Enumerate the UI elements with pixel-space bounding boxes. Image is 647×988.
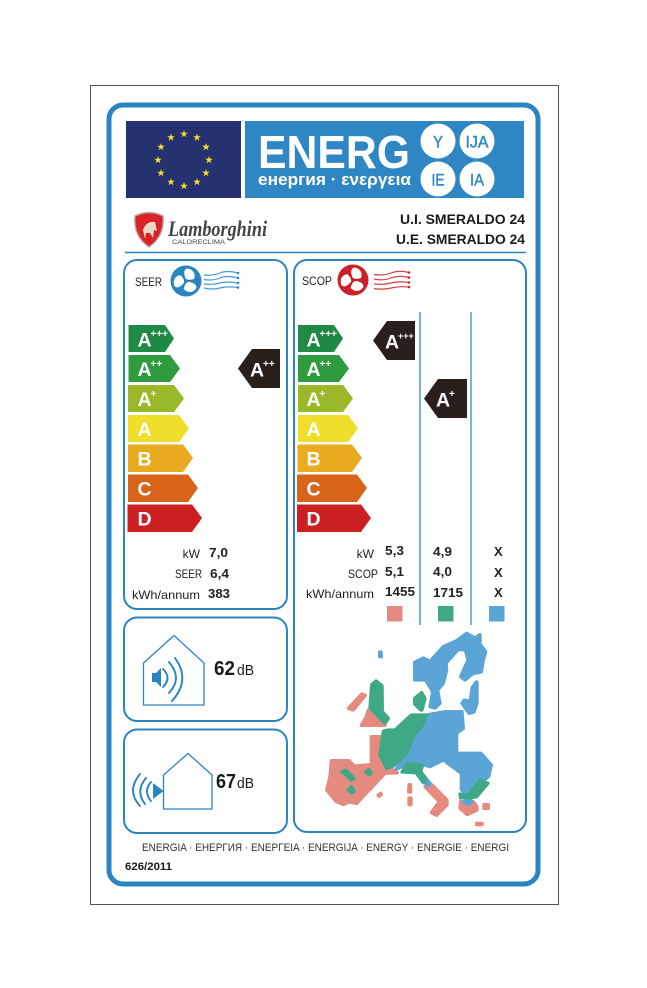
energy scale: B	[138, 448, 152, 470]
energy scale: +	[150, 389, 156, 400]
rating arrow A++: A	[250, 360, 264, 382]
SEER values: kW	[183, 547, 201, 561]
rating arrow A+	[424, 379, 467, 418]
energy scale	[297, 325, 371, 532]
SEER values: 6,4	[210, 566, 230, 581]
regulation number: 626/2011	[125, 861, 172, 873]
SCOP values: 5,1	[385, 564, 404, 579]
energy scale: D	[138, 508, 152, 530]
energy scale: ++	[150, 359, 162, 370]
energy scale: A	[306, 419, 321, 441]
panel: SEER cooling	[124, 260, 287, 609]
rating arrow A+++: +++	[398, 331, 414, 341]
SEER values: 383	[208, 586, 230, 601]
indoor noise value: dB	[237, 662, 254, 679]
indoor noise value: 62	[214, 658, 235, 680]
icon: cooling fan	[170, 266, 202, 296]
SCOP heading: SCOP	[302, 274, 332, 288]
energy scale: A	[306, 389, 321, 411]
icon: heating fan	[338, 264, 368, 296]
energy banner: IA	[470, 170, 485, 190]
energy scale: A	[306, 330, 321, 352]
energy banner	[245, 121, 524, 198]
rating arrow A+++: A	[385, 332, 399, 354]
outdoor noise value	[216, 771, 254, 793]
energy scale: A	[138, 359, 152, 381]
icon: house outline	[144, 636, 204, 705]
energy scale	[128, 325, 202, 532]
SCOP values: 5,3	[385, 543, 404, 558]
SEER values: kWh/annum	[132, 588, 200, 602]
icon: warm air waves	[374, 271, 410, 289]
outdoor noise value: 67	[216, 771, 236, 793]
model names	[396, 211, 525, 247]
energy scale: C	[306, 478, 321, 500]
indoor noise value	[214, 658, 254, 680]
rating arrow A++	[238, 349, 280, 388]
energy scale: A	[306, 359, 321, 381]
icon: house outline	[164, 754, 212, 809]
energy scale: A	[138, 419, 152, 441]
energy scale: A	[138, 330, 152, 352]
energy banner: Y	[433, 132, 443, 152]
SCOP values: SCOP	[348, 567, 378, 581]
footer languages: ENERGIA · ЕНЕРГИЯ · ΕΝΕΡΓΕΙΑ · ENERGIJA · ENERGY · ENERGIE · ENERGI	[142, 842, 509, 854]
icon: speaker with sound waves	[133, 774, 162, 806]
rating arrow A++: ++	[263, 359, 275, 370]
model names: U.I. SMERALDO 24	[400, 211, 525, 227]
EU flag	[126, 121, 241, 198]
SCOP values: 4,9	[433, 544, 452, 559]
brand logo: Lamborghini	[167, 216, 268, 241]
SCOP values: 1455	[385, 584, 415, 599]
panel: indoor noise	[124, 618, 287, 721]
energy banner: IE	[432, 170, 444, 190]
energy scale: A	[138, 389, 152, 411]
energy scale: D	[306, 508, 321, 530]
panel: SCOP heating and map	[294, 260, 526, 832]
icon: cold air waves	[204, 272, 239, 289]
energy scale: +	[320, 389, 326, 400]
energy scale: ++	[320, 359, 331, 370]
outdoor noise value: dB	[237, 775, 254, 792]
SCOP values: X	[494, 544, 503, 559]
SCOP values: kW	[357, 547, 375, 561]
label frame	[109, 105, 538, 884]
rating arrow A+: A	[436, 390, 450, 412]
SCOP values: 4,0	[433, 564, 452, 579]
icon: speaker with sound waves	[152, 658, 182, 701]
energy scale: +++	[320, 329, 337, 340]
rating arrow A+++	[373, 321, 415, 360]
model names: U.E. SMERALDO 24	[396, 231, 525, 247]
SEER heading: SEER	[135, 275, 162, 289]
energy banner: енергия · ενεργεια	[258, 171, 411, 189]
brand logo	[135, 212, 268, 247]
energy scale: B	[306, 448, 321, 470]
SCOP values: X	[494, 585, 503, 600]
SEER values	[132, 545, 230, 602]
rating arrow A+: +	[449, 389, 455, 400]
brand logo: CALORECLIMA	[172, 239, 226, 246]
SCOP values: X	[494, 565, 503, 580]
energy scale: C	[138, 478, 152, 500]
outer page border	[90, 86, 558, 904]
energy banner: ENERG	[258, 126, 410, 178]
SEER values: SEER	[175, 567, 202, 581]
map of Europe climate zones	[327, 633, 491, 825]
panel: outdoor noise	[124, 730, 287, 833]
SCOP values: kWh/annum	[306, 587, 374, 601]
energy scale: +++	[150, 329, 168, 340]
energy banner: IJA	[466, 132, 489, 152]
SCOP values: 1715	[433, 585, 463, 600]
SCOP values	[306, 543, 503, 601]
SEER values: 7,0	[209, 545, 228, 560]
climate zone legend	[387, 606, 504, 622]
